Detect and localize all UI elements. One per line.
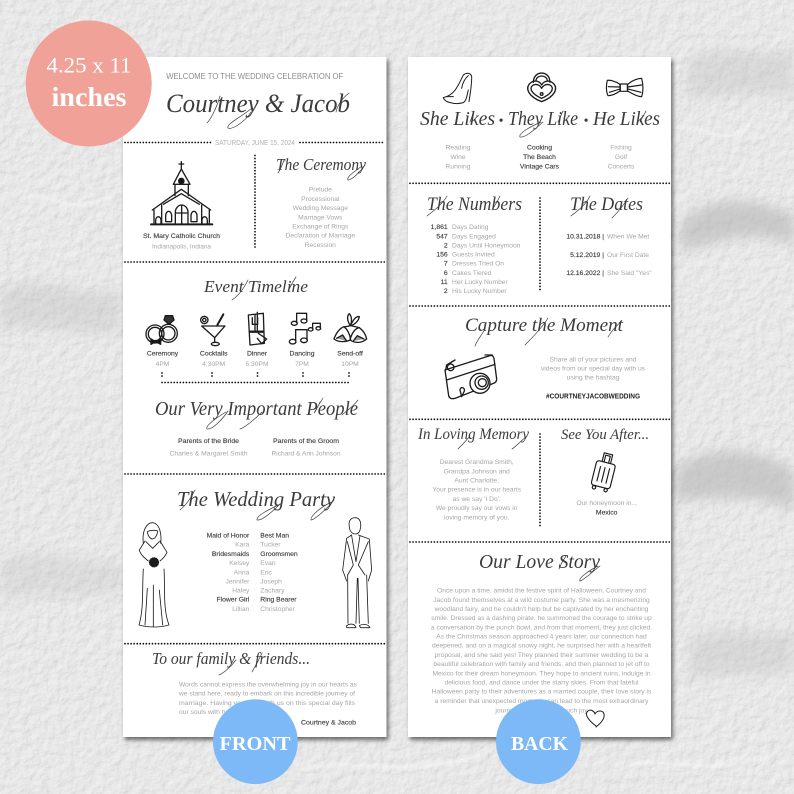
wedding party list: Zachary xyxy=(260,588,285,595)
love story text: proposal, and she said yes! They planned their summer wedding to be a xyxy=(435,652,649,659)
heading: in loving memory xyxy=(417,426,530,449)
wedding party list: Eric xyxy=(260,569,272,576)
likes lists: Fishing xyxy=(610,145,632,152)
timeline times: 10PM xyxy=(341,361,359,368)
icon: heart xyxy=(586,710,604,727)
heading: see you after: See You After... xyxy=(561,427,649,443)
memorial text xyxy=(432,459,522,521)
badge: back: BACK xyxy=(511,733,568,755)
timeline labels: Ceremony xyxy=(147,350,179,357)
timeline labels: Send-off xyxy=(337,350,363,357)
numbers list: 1,861 xyxy=(431,224,448,231)
wedding party list xyxy=(207,532,298,613)
wedding party list: Kelsey xyxy=(229,560,250,567)
badge: front xyxy=(213,699,298,784)
numbers list: Guests Invited xyxy=(452,252,495,259)
card background xyxy=(123,57,386,737)
wedding party list: Maid of Honor xyxy=(207,532,250,539)
icon: church xyxy=(151,162,212,224)
thank you message: we stand here, ready to embark on this incredible journey of xyxy=(178,691,355,698)
timeline times: 4:30PM xyxy=(202,361,226,368)
timeline times: 7PM xyxy=(295,361,309,368)
likes lists: Vintage Cars xyxy=(520,163,560,170)
heading: to our family and friends xyxy=(152,649,310,675)
heading: our very important people: Our Very Important People xyxy=(155,399,358,420)
icon: high heel xyxy=(443,73,472,104)
timeline labels: Dancing xyxy=(290,350,315,357)
heading: the wedding party: The Wedding Party xyxy=(177,487,335,511)
thank you message: marriage. Having you here with us on this special day fills xyxy=(179,700,356,707)
numbers list: His Lucky Number xyxy=(452,288,507,295)
icon: dinner menu xyxy=(248,312,267,345)
numbers list: 156 xyxy=(436,252,448,259)
dates list: 5.12.2019 | xyxy=(570,252,604,259)
ceremony order list: Recession xyxy=(305,242,336,249)
parents: Richard & Ann Johnson xyxy=(272,450,341,457)
likes lists: The Beach xyxy=(523,154,556,161)
ceremony order list xyxy=(286,187,355,249)
likes lists: Wine xyxy=(450,154,466,161)
love story text: smile. Dressed as a dashing pirate, he summoned the courage to strike up xyxy=(431,615,652,622)
heading: she likes they like he likes: • xyxy=(498,114,504,129)
wedding party list: Groomsmen xyxy=(260,551,298,558)
memorial text: Your presence is in our hearts xyxy=(432,487,522,494)
likes lists: Golf xyxy=(615,154,627,161)
honeymoon note: Our honeymoon in... xyxy=(576,500,637,507)
numbers list xyxy=(431,224,521,295)
timeline labels: Dinner xyxy=(247,350,268,357)
parents: Parents of the Groom xyxy=(273,438,339,445)
memorial text: Aunt Charlotte, xyxy=(454,477,499,484)
dates list: 10.31.2018 | xyxy=(566,234,604,241)
parents: Charles & Margaret Smith xyxy=(170,450,248,457)
panel: front card xyxy=(123,57,386,737)
icon: cocktail xyxy=(201,314,225,346)
timeline connector xyxy=(162,373,349,382)
ceremony order list: Processional xyxy=(301,196,340,203)
numbers list: 11 xyxy=(441,279,448,286)
love story text: Halloween party to their adventures as a married couple, their love story is xyxy=(432,689,652,696)
wedding party list: Tucker xyxy=(260,542,281,549)
heading: event timeline: Event Timeline xyxy=(203,277,308,296)
numbers list: 2 xyxy=(444,242,448,249)
timeline times xyxy=(156,361,359,368)
heading: she likes they like he likes xyxy=(420,108,660,137)
love story text: woodland fairy, and he couldn't help but be captivated by her enchanting xyxy=(434,606,649,613)
love story text: Once upon a time, amidst the festive spirit of Halloween, Courtney and xyxy=(437,588,646,595)
badge: size: inches xyxy=(52,82,126,112)
thank you message: Courtney & Jacob xyxy=(301,719,356,726)
numbers list: Dresses Tried On xyxy=(452,261,504,268)
wedding party list: Joseph xyxy=(260,578,282,585)
parents xyxy=(170,438,341,457)
icon: groom xyxy=(343,518,372,628)
card background xyxy=(408,57,671,737)
love story text: delicious food, and dance under the starry skies. From that fateful xyxy=(444,679,639,686)
ceremony order list: Declaration of Marriage xyxy=(286,233,355,240)
numbers list: Cakes Tiered xyxy=(452,270,492,277)
icon: heart padlock xyxy=(528,73,556,102)
icon: wedding bells xyxy=(334,314,367,342)
love story text: Jacob found themselves at a wild costume party. She was a mesmerizing xyxy=(433,597,650,604)
wedding party list: Christopher xyxy=(260,606,296,613)
timeline labels: Cocktails xyxy=(200,350,228,357)
wedding party list: Bridesmaids xyxy=(212,551,250,558)
couple names: Courtney & Jacob xyxy=(166,88,350,118)
icon: camera xyxy=(445,355,497,399)
date: SATURDAY, JUNE 15, 2024 xyxy=(215,140,295,147)
wedding party list: Flower Girl xyxy=(216,597,250,604)
heading: our very important people xyxy=(155,398,358,429)
badge: back xyxy=(496,699,581,784)
badge: front: FRONT xyxy=(220,733,291,755)
love story text: As the Christmas season approached 4 years later, our connection had xyxy=(436,634,647,641)
honeymoon note: Mexico xyxy=(596,509,618,516)
icon: rings xyxy=(146,316,177,344)
love story text: Mexico for their dream honeymoon. They hope to ancient ruins, indulge in xyxy=(432,670,651,677)
memorial text: Dearest Grandma Smith, xyxy=(440,459,514,466)
icon: bride xyxy=(139,523,169,627)
heading: our love story: Our Love Story xyxy=(479,551,600,573)
likes lists: Concerts xyxy=(608,163,635,170)
numbers list: 7 xyxy=(444,261,448,268)
numbers list: Days Dating xyxy=(452,224,489,231)
dates list: When We Met xyxy=(607,234,649,241)
likes lists: Cooking xyxy=(527,145,552,152)
thank you message: our souls with happiness. xyxy=(179,709,254,716)
heading: in loving memory: In Loving Memory xyxy=(417,426,530,443)
memorial text: We proudly say our vows in xyxy=(436,505,518,512)
heading: the dates: The Dates xyxy=(570,194,643,215)
numbers list: Her Lucky Number xyxy=(452,279,509,286)
heading: to our family and friends: To our family & friends... xyxy=(152,649,310,668)
dates list: She Said "Yes" xyxy=(607,270,652,277)
badge: size xyxy=(26,20,152,146)
ceremony order list: Marriage Vows xyxy=(298,214,343,221)
honeymoon note xyxy=(576,500,637,516)
wedding party list: Ring Bearer xyxy=(260,597,297,604)
likes lists: Reading xyxy=(446,145,471,152)
love story text: deepened, and on a magical snowy night, he surprised her with a heartfelt xyxy=(432,643,651,650)
timeline times: 4PM xyxy=(156,361,170,368)
numbers list: 6 xyxy=(444,270,448,277)
timeline labels xyxy=(147,350,363,357)
church name and place: St. Mary Catholic Church xyxy=(143,233,220,240)
timeline times: 5:30PM xyxy=(245,361,269,368)
wedding party list: Lillian xyxy=(232,606,250,613)
wedding party list: Jennifer xyxy=(226,578,250,585)
icon: suitcase xyxy=(590,451,618,493)
wedding party list: Kara xyxy=(235,542,250,549)
hashtag instructions: #COURTNEYJACOBWEDDING xyxy=(546,393,641,400)
likes lists: Running xyxy=(446,163,471,170)
icon: music notes xyxy=(289,313,321,344)
ceremony order list: Wedding Message xyxy=(293,205,348,212)
memorial text: as we say 'I Do'. xyxy=(453,496,501,503)
wedding party list: Haley xyxy=(232,588,250,595)
love story text: beautiful celebration with family and friends, and then planned to jet off to xyxy=(433,661,650,668)
ceremony order list: Prelude xyxy=(309,187,332,194)
hashtag instructions: Share all of your pictures and xyxy=(550,356,637,363)
numbers list: Days Engaged xyxy=(452,233,496,240)
church name and place: Indianapolis, Indiana xyxy=(152,244,211,250)
event timeline xyxy=(146,312,367,382)
love story text: a conversation by the punch bowl, and from that moment, they just clicked. xyxy=(431,624,652,631)
heading: she likes they like he likes: She Likes xyxy=(420,108,495,130)
thank you message xyxy=(178,682,358,726)
hashtag instructions: videos from our special day with us xyxy=(541,365,646,372)
dates list: 12.16.2022 | xyxy=(566,270,604,277)
memorial text: Grandpa Johnson and xyxy=(444,468,510,475)
numbers list: 547 xyxy=(436,233,448,240)
dates list xyxy=(566,234,652,277)
wedding party list: Best Man xyxy=(260,532,289,539)
welcome heading: WELCOME TO THE WEDDING CELEBRATION OF xyxy=(166,71,343,81)
heading: she likes they like he likes: • xyxy=(584,114,588,129)
ceremony order list: Exchange of Rings xyxy=(292,223,349,230)
wedding party list: Evan xyxy=(260,560,276,567)
hashtag instructions: using the hashtag xyxy=(567,375,620,382)
likes lists xyxy=(446,145,635,170)
icon: bow tie xyxy=(606,78,643,97)
thank you message: Words cannot express the overwhelming joy in our hearts as xyxy=(179,682,358,689)
panel: back card xyxy=(408,57,671,737)
heading: capture the moment: Capture the Moment xyxy=(465,316,624,336)
love story text: journeys filled with so much joy xyxy=(494,707,588,714)
dates list: Our First Date xyxy=(607,252,649,259)
hashtag instructions xyxy=(541,356,646,400)
badge: size: 4.25 x 11 xyxy=(46,53,132,78)
memorial text: loving memory of you. xyxy=(444,514,510,521)
church name and place xyxy=(143,233,220,250)
heading: the numbers: The Numbers xyxy=(427,194,522,215)
numbers list: 2 xyxy=(444,288,448,295)
parents: Parents of the Bride xyxy=(178,438,239,445)
heading: capture the moment xyxy=(465,316,624,346)
numbers list: Days Until Honeymoon xyxy=(452,242,521,249)
love story text: a reminder that unexpected moments can lead to the most extraordinary xyxy=(435,698,649,705)
love story text xyxy=(431,588,652,714)
heading: she likes they like he likes: They Like xyxy=(508,108,578,130)
heading: she likes they like he likes: He Likes xyxy=(592,108,660,130)
wedding party list: Anna xyxy=(234,569,250,576)
heading: the ceremony: The Ceremony xyxy=(276,155,366,174)
